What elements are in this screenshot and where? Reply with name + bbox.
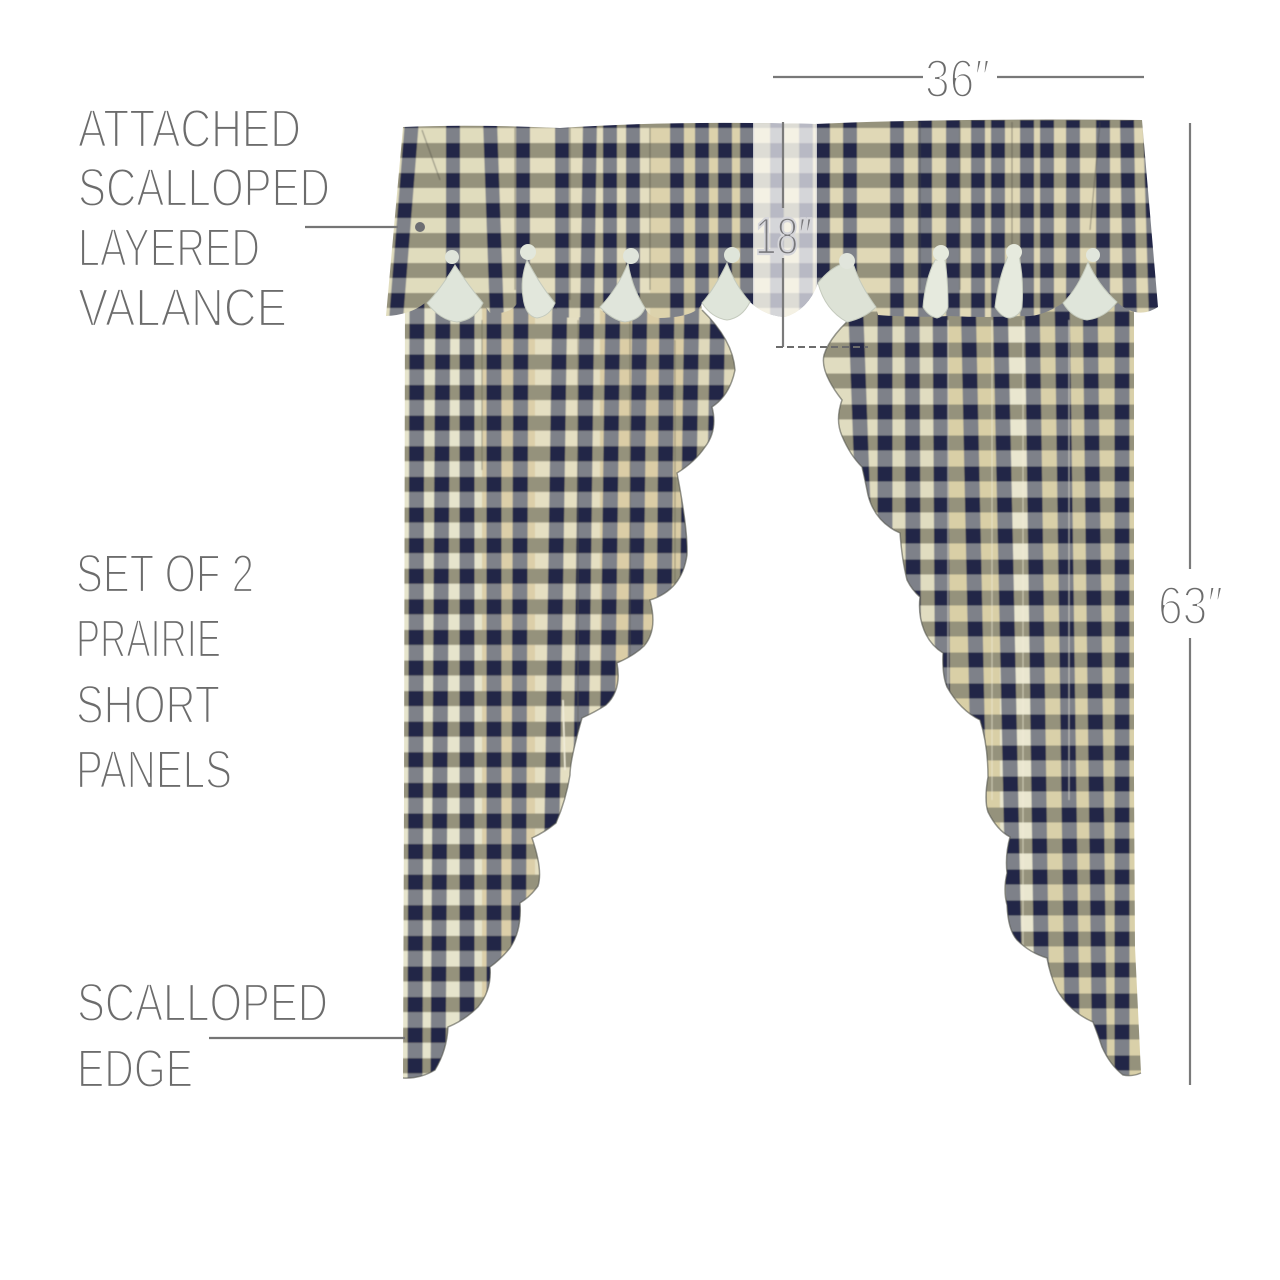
curtain: left prairie panel <box>395 290 745 1090</box>
text: attached scalloped layered valance: LAYERED <box>78 218 260 278</box>
tab: tassel 8 <box>1063 248 1117 320</box>
tab: tassel 4 <box>702 247 750 320</box>
text: attached scalloped layered valance: ATTACHED <box>78 99 301 159</box>
text: attached scalloped layered valance: SCALLOPED <box>78 158 330 218</box>
hem: left scalloped edge <box>403 310 735 1078</box>
text: attached scalloped layered valance <box>78 99 330 338</box>
dimension: length 63 inches: 63″ <box>1158 576 1223 636</box>
tab: tassel 2 <box>520 244 555 318</box>
valance: attached scalloped layered valance <box>380 115 1165 325</box>
text: attached scalloped layered valance: VALANCE <box>78 278 287 338</box>
text: scalloped edge <box>77 973 328 1099</box>
text: set of 2 prairie short panels: SHORT <box>76 675 220 735</box>
text: set of 2 prairie short panels: SET OF 2 <box>76 544 254 604</box>
tab: tassel 6 <box>923 245 949 318</box>
text: set of 2 prairie short panels: PRAIRIE <box>76 609 221 669</box>
curtain: right prairie panel <box>815 290 1150 1090</box>
text: set of 2 prairie short panels <box>76 544 254 800</box>
hem: right scalloped edge <box>823 310 1141 1076</box>
tab: tassel 3 <box>600 248 645 322</box>
leader line: scalloped edge <box>209 1037 405 1039</box>
leader line: valance <box>305 222 425 232</box>
text: scalloped edge: EDGE <box>77 1039 193 1099</box>
dimension: valance drop 18 inches: 18″ <box>755 208 812 266</box>
text: set of 2 prairie short panels: PANELS <box>76 740 232 800</box>
dimension: width 36 inches: 36″ <box>925 49 990 109</box>
tab: tassel 5 <box>818 253 876 322</box>
tab: tassel 1 <box>427 250 483 322</box>
translucent highlight band: 18 inch drop area <box>753 120 817 320</box>
text: scalloped edge: SCALLOPED <box>77 973 328 1033</box>
tab: tassel 7 <box>995 244 1023 318</box>
